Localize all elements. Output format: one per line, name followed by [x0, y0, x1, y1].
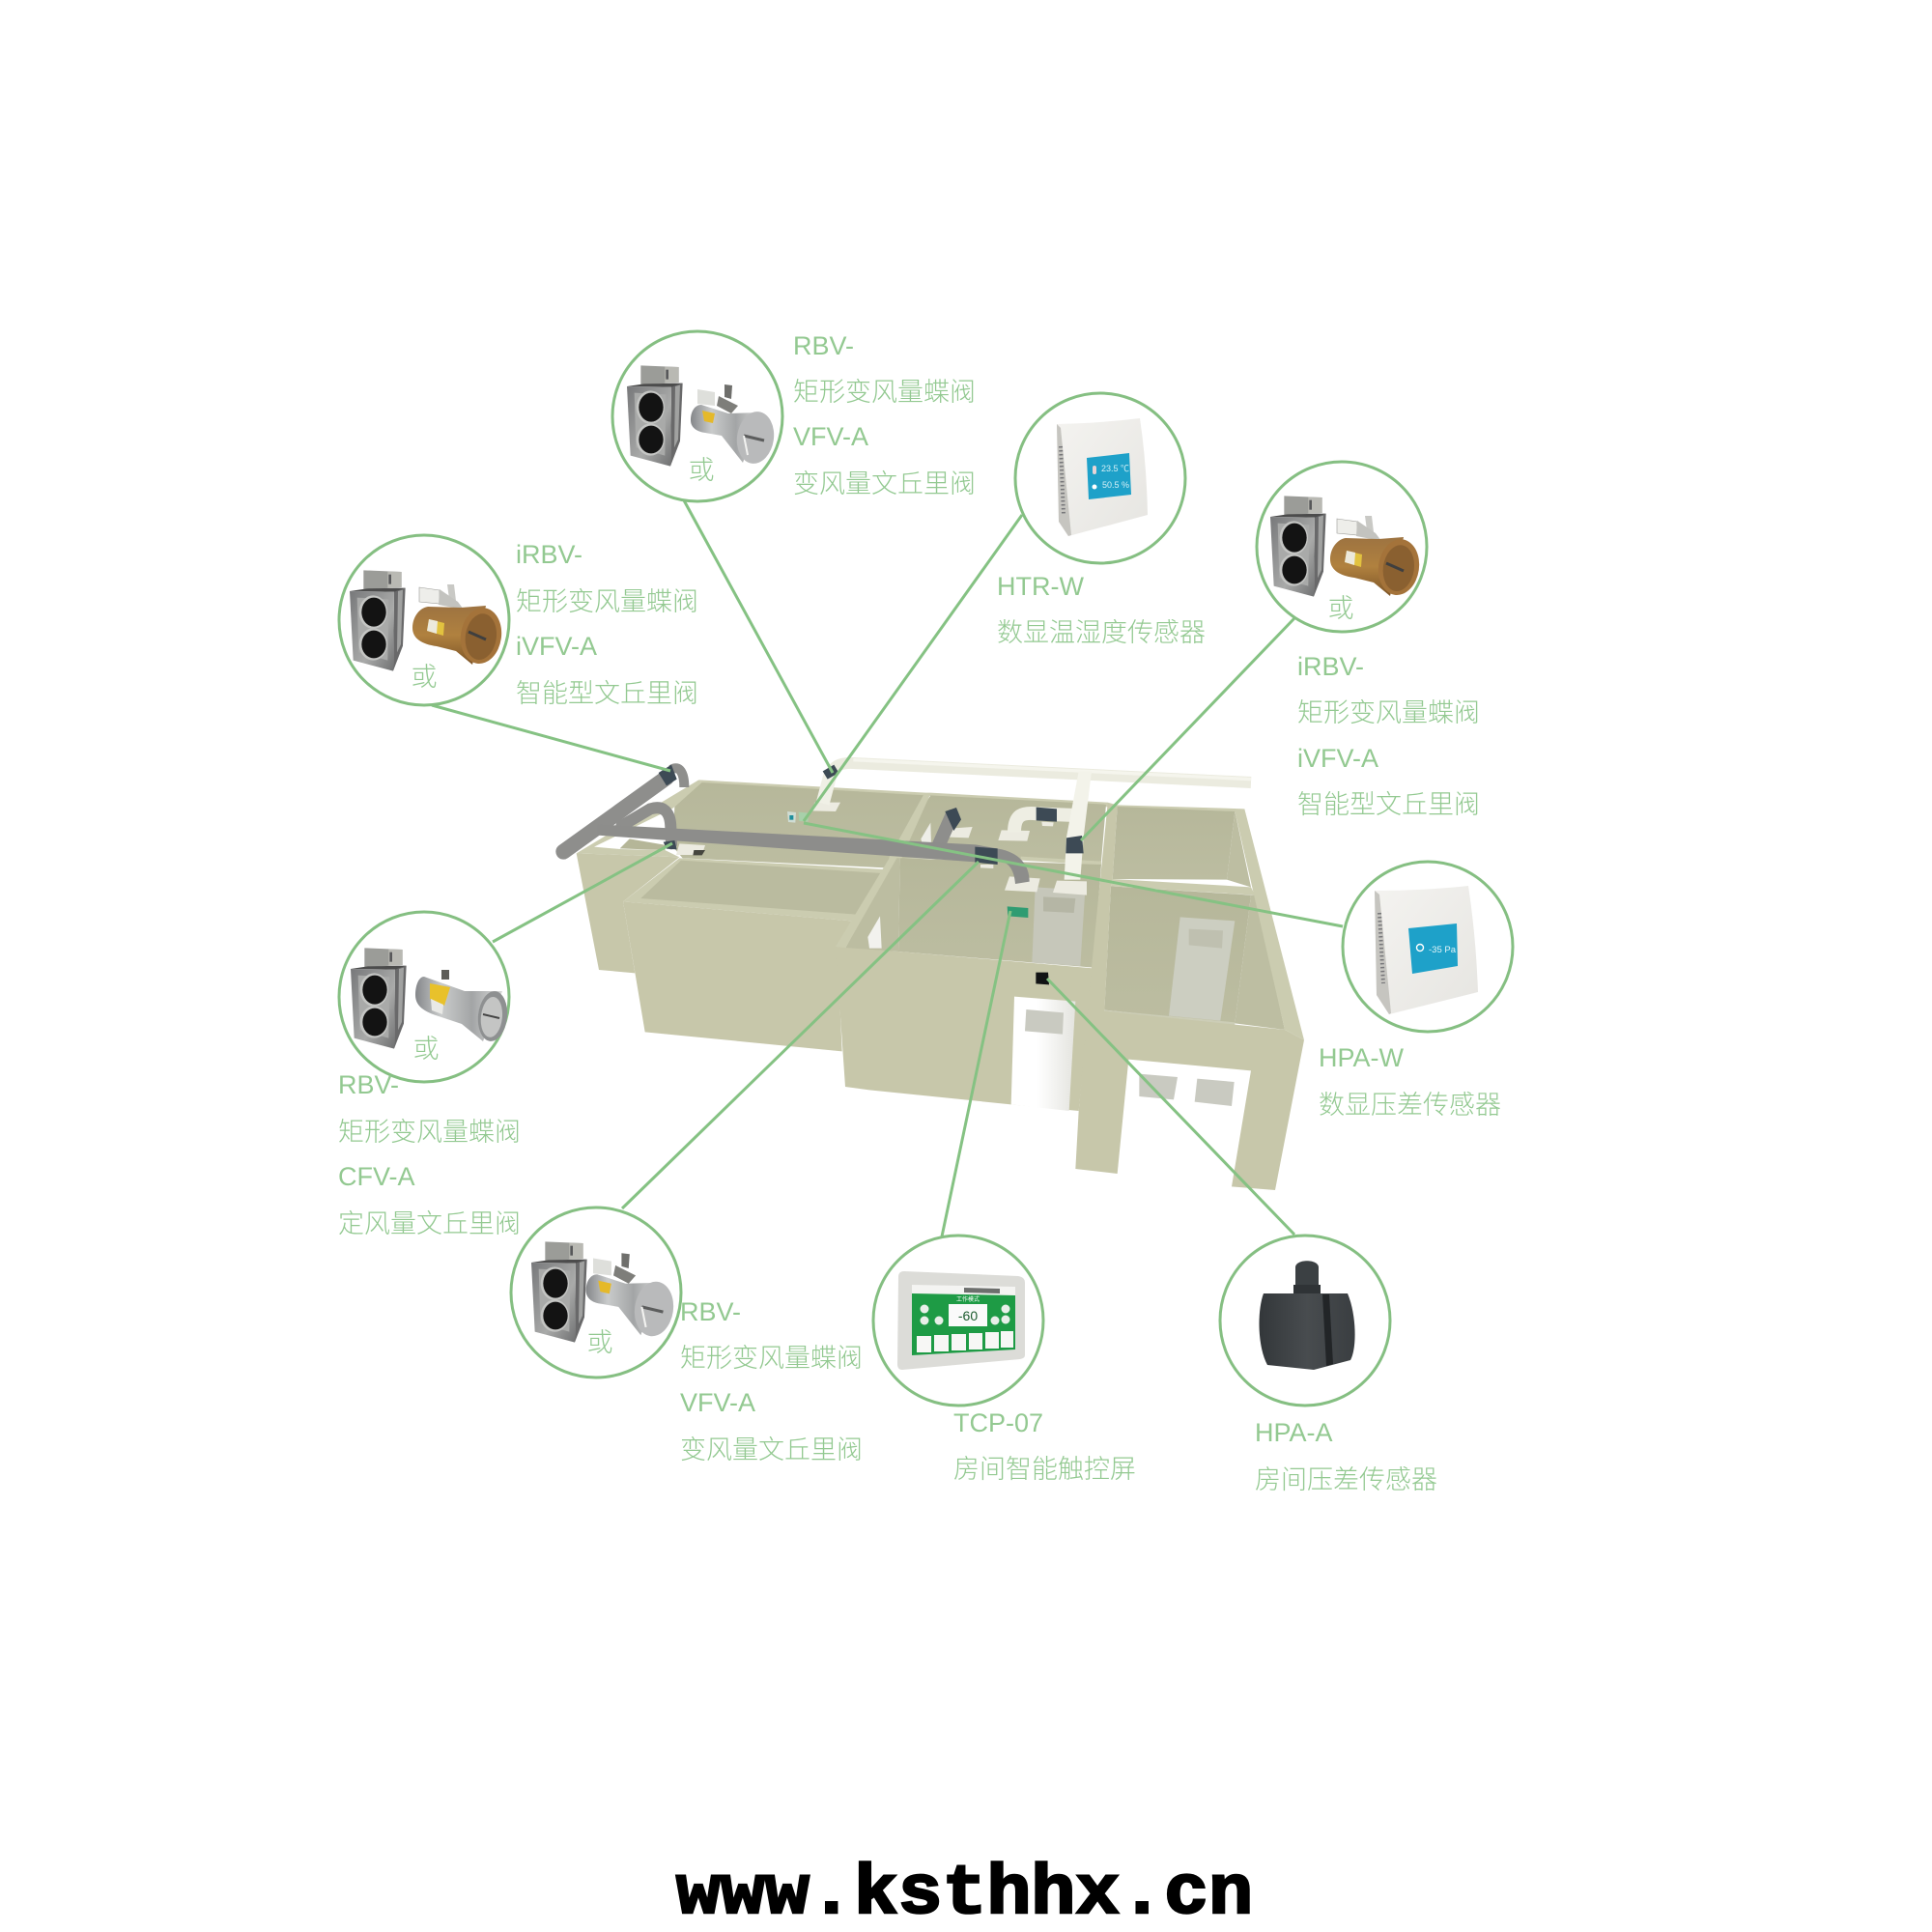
- divider rim: [889, 794, 930, 858]
- icon: silver venturi valve: [586, 1253, 677, 1339]
- label text: HPA-A: [1255, 1418, 1333, 1447]
- icon: touch panel: -60: [958, 1308, 978, 1323]
- icon: touch panel: 工作模式: [956, 1295, 980, 1303]
- circle: [1343, 862, 1513, 1032]
- label text: VFV-A: [680, 1388, 755, 1417]
- circle: [1257, 462, 1427, 632]
- label text: [1255, 1418, 1437, 1494]
- icon: dark pressure sensor: [1259, 1261, 1355, 1370]
- label text: [793, 331, 976, 498]
- label text: iRBV-: [1297, 652, 1364, 681]
- leader line: [493, 843, 672, 942]
- leader line: [622, 862, 979, 1208]
- icon: butterfly damper: [350, 570, 406, 671]
- icon: butterfly damper: [531, 1241, 587, 1343]
- icon: butterfly damper: [351, 948, 407, 1049]
- website watermark: www.ksthhx.cn: [676, 1855, 1253, 1932]
- icon: temperature and humidity sensor: [1057, 418, 1148, 536]
- label text: 智能型文丘里阀: [1297, 790, 1480, 819]
- grey ducts: [563, 768, 952, 852]
- double door windows: [1139, 1074, 1178, 1099]
- right rim: [1235, 809, 1304, 1040]
- touch panel on wall: [1008, 906, 1028, 918]
- left back room interior: [673, 781, 925, 867]
- building model: [563, 760, 1304, 1190]
- label text: 矩形变风量蝶阀: [680, 1344, 863, 1373]
- label text: VFV-A: [793, 422, 868, 451]
- label text: 矩形变风量蝶阀: [793, 378, 976, 407]
- middle room left wall: [845, 858, 900, 952]
- front-left box face: [623, 901, 852, 1051]
- leader line: [684, 500, 833, 773]
- callout: iRBV / iVFV-A upper left: [339, 535, 698, 771]
- lower right room: [1104, 886, 1251, 1023]
- middle room rim: [836, 857, 896, 949]
- vent plates: [676, 803, 1087, 895]
- callout: RBV / VFV-A bottom: [511, 862, 979, 1464]
- trough behind ducts: [620, 838, 667, 850]
- callout: iRBV / iVFV-A right: [1081, 462, 1480, 840]
- label text: RBV-: [338, 1070, 399, 1099]
- label text: iRBV-: [516, 540, 582, 569]
- middle room front face: [836, 947, 1094, 1111]
- label text: [1297, 652, 1480, 819]
- label text: [953, 1408, 1136, 1484]
- circle: [339, 535, 509, 705]
- middle room back wall: [898, 858, 1101, 968]
- circle: [612, 331, 782, 501]
- label text: HPA-W: [1319, 1043, 1405, 1072]
- circle: [339, 912, 509, 1082]
- center room ledge: [1021, 857, 1101, 866]
- label text: RBV-: [793, 331, 854, 360]
- icon: butterfly damper: [627, 365, 683, 467]
- front-left box rim: [623, 858, 886, 921]
- white branch duct: [1065, 771, 1092, 880]
- or label: 或: [412, 663, 437, 692]
- label text: 房间智能触控屏: [953, 1455, 1136, 1484]
- label text: [1319, 1043, 1501, 1120]
- back center door: [1032, 887, 1085, 966]
- front-left box interior: [640, 861, 882, 915]
- callout: HPA-W pressure sensor: [804, 823, 1513, 1120]
- right room door: [1169, 917, 1235, 1021]
- icon: brown venturi valve: [1330, 516, 1423, 598]
- label text: 变风量文丘里阀: [793, 469, 976, 498]
- label text: 矩形变风量蝶阀: [1297, 698, 1480, 727]
- icon: butterfly damper: [1270, 496, 1326, 597]
- icon: differential pressure display sensor: [1375, 886, 1478, 1014]
- icon: silver venturi valve: [691, 384, 778, 466]
- icon: differential pressure display sensor: -35 Pa: [1429, 945, 1457, 955]
- label text: 数显压差传感器: [1319, 1091, 1501, 1120]
- right facade and wall strip: [1075, 804, 1304, 1190]
- white ducts: [823, 760, 1251, 833]
- circle: [1015, 393, 1185, 563]
- label text: HTR-W: [997, 572, 1084, 601]
- leader line: [1047, 979, 1294, 1235]
- duct damper collars: [659, 765, 1084, 865]
- or label: 或: [688, 456, 715, 485]
- upper right room: [1113, 807, 1235, 880]
- divider between right rooms: [1111, 879, 1255, 895]
- label text: CFV-A: [338, 1162, 415, 1191]
- leader line: [942, 911, 1010, 1236]
- circle: [1220, 1236, 1390, 1406]
- callout: RBV / CFV-A left: [338, 843, 672, 1238]
- back wall rim: [698, 780, 1244, 812]
- icon: temperature and humidity sensor: 50.5 %: [1102, 480, 1129, 490]
- callout: RBV / VFV-A top: [612, 331, 976, 773]
- callout: TCP-07 touch screen: [873, 911, 1136, 1484]
- center back room interior: [889, 795, 1106, 862]
- leader line: [804, 823, 1343, 926]
- label text: iVFV-A: [1297, 744, 1378, 773]
- side door in center back room: [921, 823, 931, 845]
- or label: 或: [413, 1035, 439, 1064]
- callout: HPA-A room pressure sensor: [1047, 979, 1437, 1494]
- or label: 或: [1327, 594, 1354, 623]
- circle: [511, 1208, 681, 1378]
- label text: 变风量文丘里阀: [680, 1435, 863, 1464]
- leader line: [804, 515, 1022, 821]
- label text: 房间压差传感器: [1255, 1465, 1437, 1494]
- label text: TCP-07: [953, 1408, 1043, 1437]
- label text: iVFV-A: [516, 632, 597, 661]
- left back room outer wall: [577, 853, 679, 973]
- label text: 矩形变风量蝶阀: [516, 587, 698, 616]
- label text: 矩形变风量蝶阀: [338, 1118, 521, 1147]
- icon: brown venturi valve: [412, 584, 505, 667]
- label text: 数显温湿度传感器: [997, 618, 1206, 647]
- icon: constant volume venturi valve: [415, 970, 510, 1042]
- label text: [516, 540, 698, 708]
- label text: [338, 1070, 521, 1238]
- icon: temperature and humidity sensor: 23.5 ℃: [1101, 464, 1129, 473]
- leader line: [432, 705, 670, 771]
- front door: [1011, 997, 1075, 1111]
- label text: [997, 572, 1206, 647]
- icon: touch panel: [897, 1271, 1025, 1370]
- wall sensors: [787, 811, 809, 823]
- label text: [680, 1297, 863, 1464]
- pressure sensor on wall: [1036, 973, 1049, 984]
- label text: RBV-: [680, 1297, 741, 1326]
- circle: [873, 1236, 1043, 1406]
- or label: 或: [587, 1328, 612, 1357]
- dark vent opening: [693, 850, 705, 855]
- left room rim: [577, 780, 702, 857]
- label text: 定风量文丘里阀: [338, 1209, 521, 1238]
- main grey duct: [597, 824, 1030, 884]
- side door in middle room: [867, 916, 882, 949]
- label text: 智能型文丘里阀: [516, 679, 698, 708]
- leader line: [1081, 618, 1294, 840]
- callout: HTR-W humidity sensor: [804, 393, 1206, 821]
